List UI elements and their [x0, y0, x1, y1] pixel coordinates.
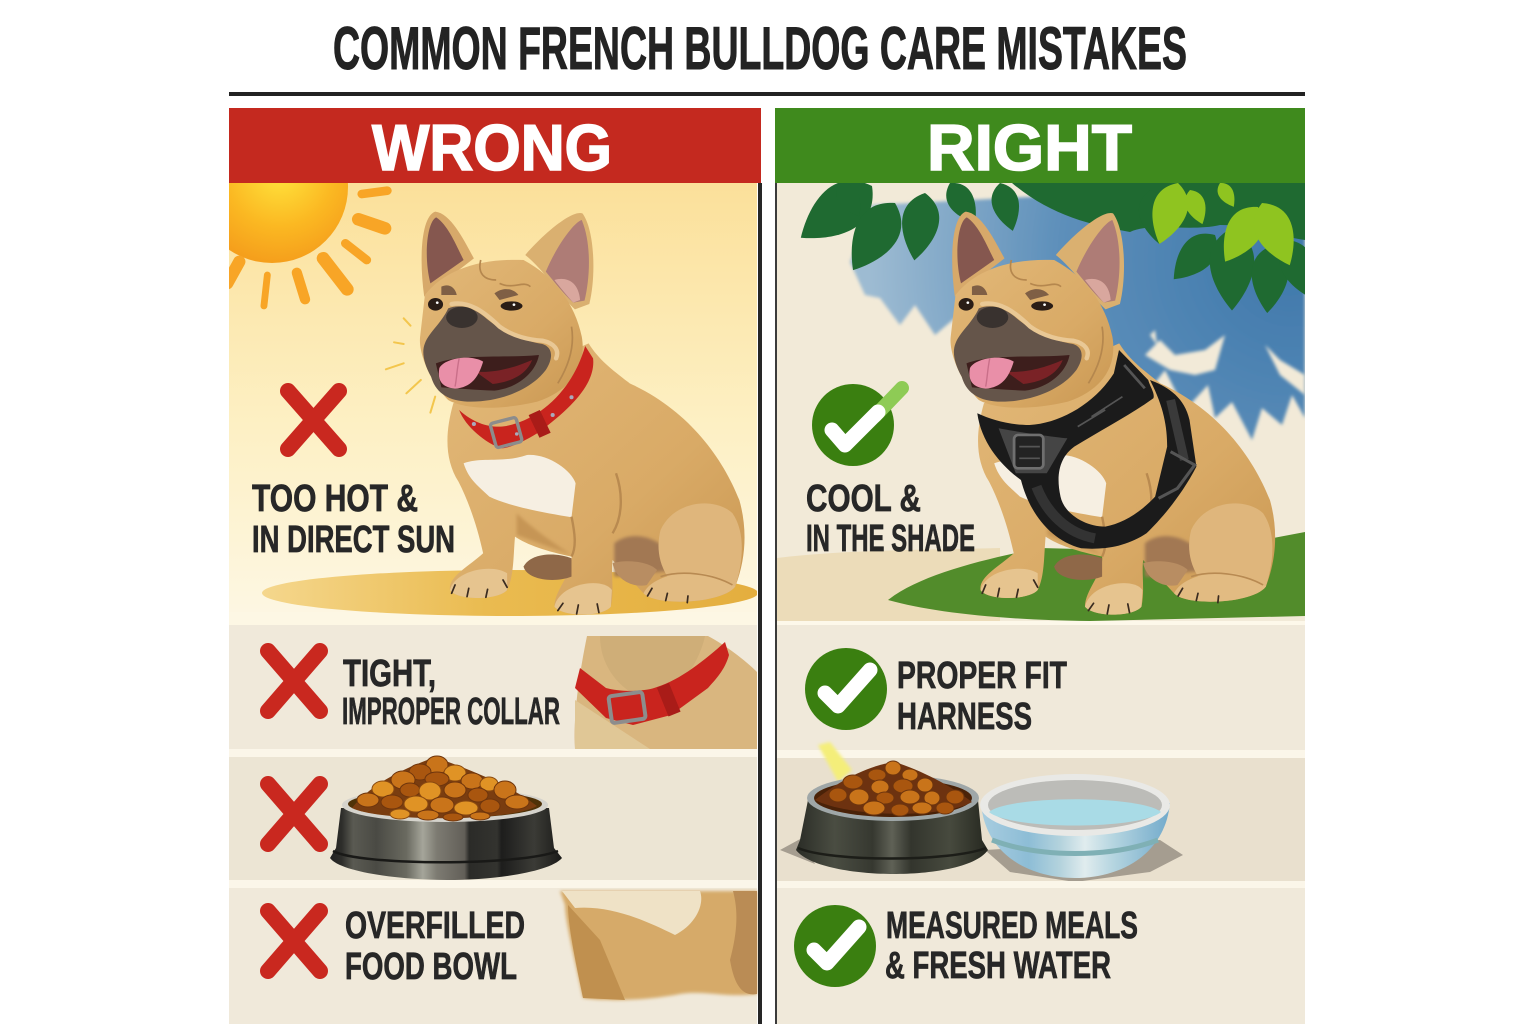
sand: [777, 548, 1000, 625]
cool leaf-gap patches: [1145, 330, 1305, 395]
heat sparks: [386, 318, 435, 413]
dog with harness: [951, 212, 1275, 615]
hero scene: too hot: [229, 183, 757, 625]
text: TIGHT,: [343, 653, 436, 695]
icon: check: [794, 905, 876, 987]
text: cool: IN THE SHADE: [806, 518, 975, 560]
icon: x: [268, 651, 320, 711]
right header: RIGHT: [927, 111, 1132, 184]
leaves: [800, 183, 1305, 313]
gap: [229, 749, 757, 757]
panel: right column: [775, 108, 1324, 1024]
gap: [229, 880, 757, 888]
text: [345, 905, 525, 988]
bowl shadows: [780, 838, 1183, 882]
sun: [229, 183, 392, 310]
title rule: [229, 92, 1305, 96]
text: PROPER FIT: [897, 655, 1067, 697]
text: too hot: IN DIRECT SUN: [252, 519, 455, 561]
text: OVERFILLED: [345, 905, 525, 947]
right header: [775, 108, 1305, 184]
collar closeup: [575, 636, 757, 749]
wrong header: WRONG: [372, 111, 612, 184]
row: measured meals: [777, 888, 1305, 1024]
text: & FRESH WATER: [885, 945, 1111, 987]
dog chest closeup: [560, 891, 757, 1000]
kibble: [352, 756, 537, 821]
text: cool: [806, 478, 975, 560]
glare: [818, 742, 852, 782]
water bowl: [980, 774, 1170, 878]
icon: check: [805, 648, 887, 730]
icon: hero check: [812, 384, 902, 466]
row: proper harness: [777, 625, 1305, 750]
ground shadow: [262, 570, 758, 616]
text: FOOD BOWL: [345, 946, 517, 988]
text: too hot: TOO HOT &: [252, 478, 418, 520]
gap: [777, 881, 1305, 888]
row: food and water bowls: [777, 742, 1305, 882]
icon: hero x: [288, 391, 339, 449]
text: HARNESS: [897, 696, 1032, 738]
icon: x: [268, 784, 320, 844]
text: MEASURED MEALS: [886, 905, 1138, 947]
grass: [888, 532, 1305, 621]
row: bowl: [229, 756, 757, 880]
text: cool: COOL &: [806, 478, 921, 520]
text: IMPROPER COLLAR: [342, 691, 560, 733]
center divider: [758, 183, 762, 1024]
wrong header: [229, 108, 761, 184]
hero scene: shade: [777, 167, 1324, 625]
right panel edge: [775, 183, 777, 1024]
overfilled bowl: [330, 756, 562, 880]
text: [897, 655, 1067, 738]
dog with red collar: [386, 212, 745, 615]
food bowl: [796, 761, 988, 874]
kibble: [815, 761, 972, 816]
text: [342, 653, 560, 733]
row: tight collar: [229, 625, 757, 749]
text: too hot: [252, 478, 455, 561]
text: [885, 905, 1138, 987]
sky and leaf shadow: [850, 183, 1305, 440]
icon: x: [268, 911, 320, 971]
panel: wrong column: [196, 108, 761, 1024]
row: overfilled bowl: [229, 888, 757, 1024]
gap: [777, 750, 1305, 758]
